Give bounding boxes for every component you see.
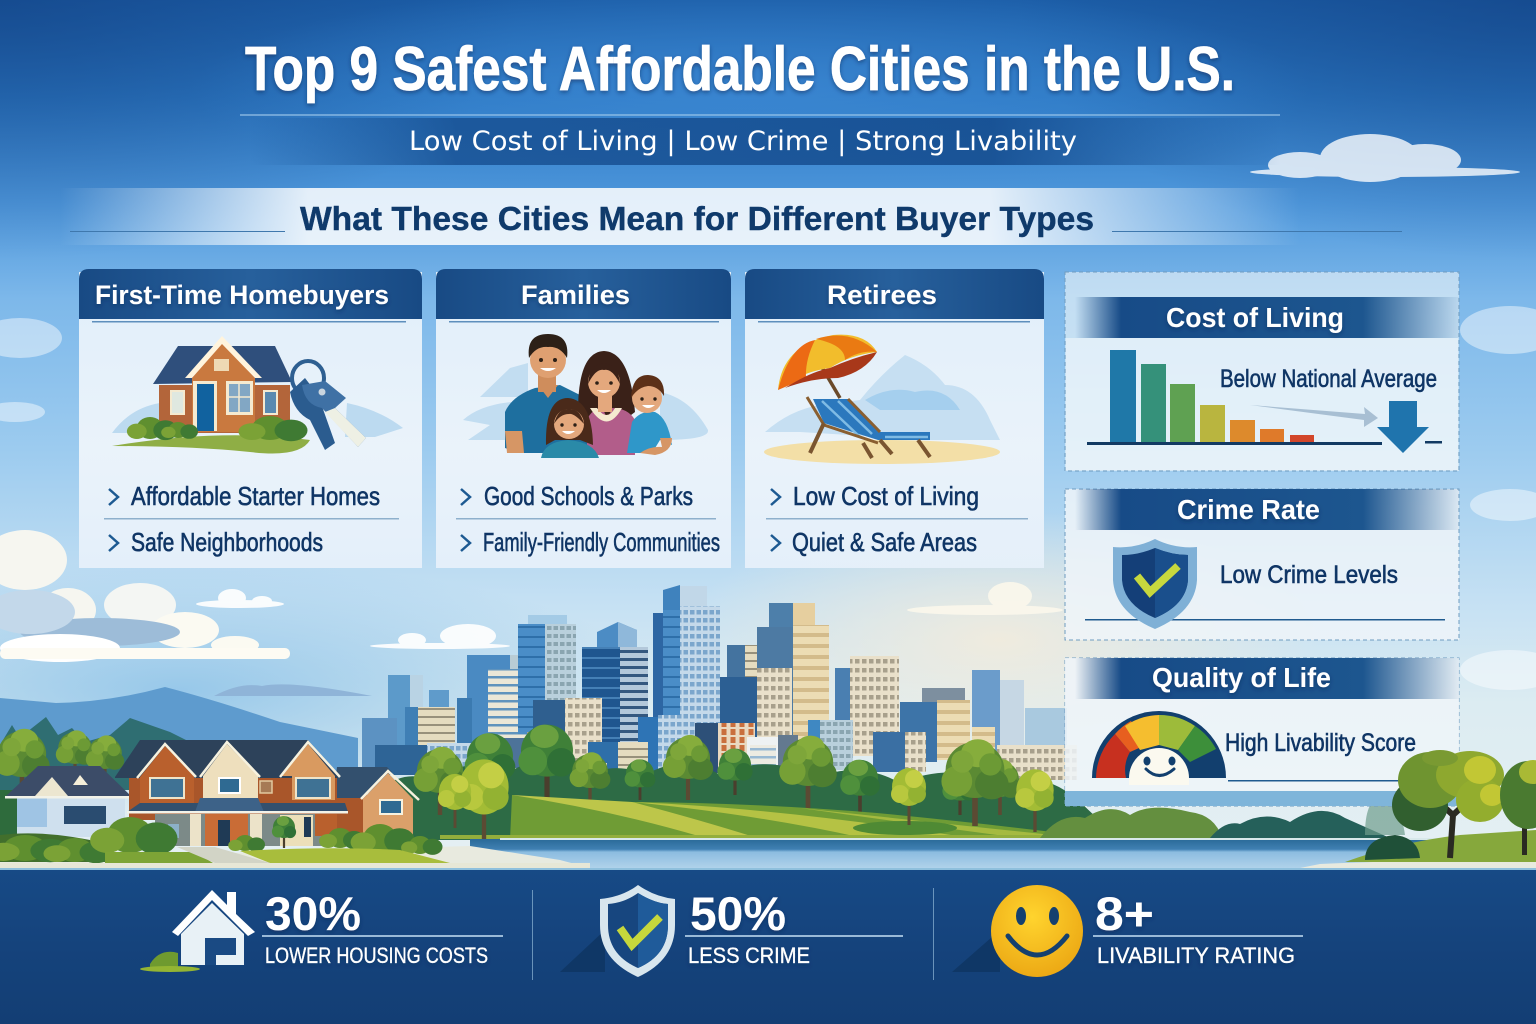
background clouds bbox=[0, 134, 1536, 690]
stat: livability rating: LIVABILITY RATING bbox=[1097, 943, 1295, 968]
city skyline bbox=[362, 585, 1077, 788]
lake bbox=[470, 838, 1536, 868]
panel: first-time homebuyers: Affordable Starter Homes bbox=[131, 481, 380, 511]
trees on the hill bbox=[438, 739, 1054, 842]
panel: quality of life: Quality of Life bbox=[1152, 662, 1331, 693]
stat: livability rating: 8+ bbox=[1095, 887, 1154, 940]
panel: cost of living: Cost of Living bbox=[1166, 302, 1344, 333]
stat: housing costs bbox=[140, 887, 503, 972]
subtitle band: Low Cost of Living | Low Crime | Strong Livability bbox=[409, 126, 1077, 157]
panel: families bbox=[436, 269, 731, 568]
houses bbox=[0, 729, 442, 863]
icon: house and keys bbox=[112, 336, 403, 454]
mountains bbox=[0, 684, 372, 790]
panel: retirees: Retirees bbox=[827, 280, 937, 310]
stat: housing costs: 30% bbox=[265, 887, 361, 940]
icon: beach chair and umbrella bbox=[764, 335, 1000, 464]
panel: crime rate: Low Crime Levels bbox=[1220, 561, 1398, 589]
stat: less crime: LESS CRIME bbox=[688, 943, 810, 968]
shoreline path bbox=[0, 846, 1536, 868]
panel: crime rate bbox=[1065, 489, 1459, 640]
panel: families: Good Schools & Parks bbox=[484, 481, 693, 511]
panel: families: Families bbox=[521, 280, 630, 310]
riverside trees right bbox=[1345, 750, 1536, 862]
icon: shield check bbox=[1113, 539, 1197, 629]
panel: quality of life: High Livability Score bbox=[1225, 729, 1416, 757]
panel: quality of life bbox=[1065, 658, 1459, 806]
panel: retirees: Quiet & Safe Areas bbox=[792, 527, 977, 557]
stat: livability rating bbox=[952, 885, 1303, 977]
panel: first-time homebuyers: Safe Neighborhoods bbox=[131, 527, 323, 557]
bar chart bbox=[1087, 350, 1442, 453]
section heading: What These Cities Mean for Different Buyer Types bbox=[300, 200, 1094, 237]
panel: retirees bbox=[745, 269, 1044, 568]
panel: families: Family-Friendly Communities bbox=[483, 527, 720, 557]
panel: first-time homebuyers: First-Time Homebuyers bbox=[95, 280, 389, 310]
distant far-shore trees bbox=[1040, 798, 1405, 838]
panel: retirees: Low Cost of Living bbox=[793, 481, 979, 511]
lawns and path bbox=[0, 847, 590, 868]
bottom stats bar bbox=[0, 868, 1536, 1024]
panel: crime rate: Crime Rate bbox=[1177, 494, 1320, 525]
subtitle band bbox=[250, 118, 1280, 165]
stat: less crime: 50% bbox=[690, 887, 786, 940]
title: Top 9 Safest Affordable Cities in the U.S. bbox=[245, 35, 1235, 104]
icon: family bbox=[463, 334, 708, 458]
tree line behind park bbox=[360, 725, 1120, 840]
section heading bbox=[60, 188, 1402, 245]
stat: less crime bbox=[560, 885, 903, 977]
stat: housing costs: LOWER HOUSING COSTS bbox=[265, 943, 488, 968]
panel: cost of living: Below National Average bbox=[1220, 365, 1437, 393]
icon: livability gauge bbox=[1092, 711, 1226, 785]
panel: cost of living bbox=[1065, 272, 1459, 471]
park hill bbox=[440, 795, 1140, 840]
panel: first-time homebuyers bbox=[79, 269, 422, 568]
